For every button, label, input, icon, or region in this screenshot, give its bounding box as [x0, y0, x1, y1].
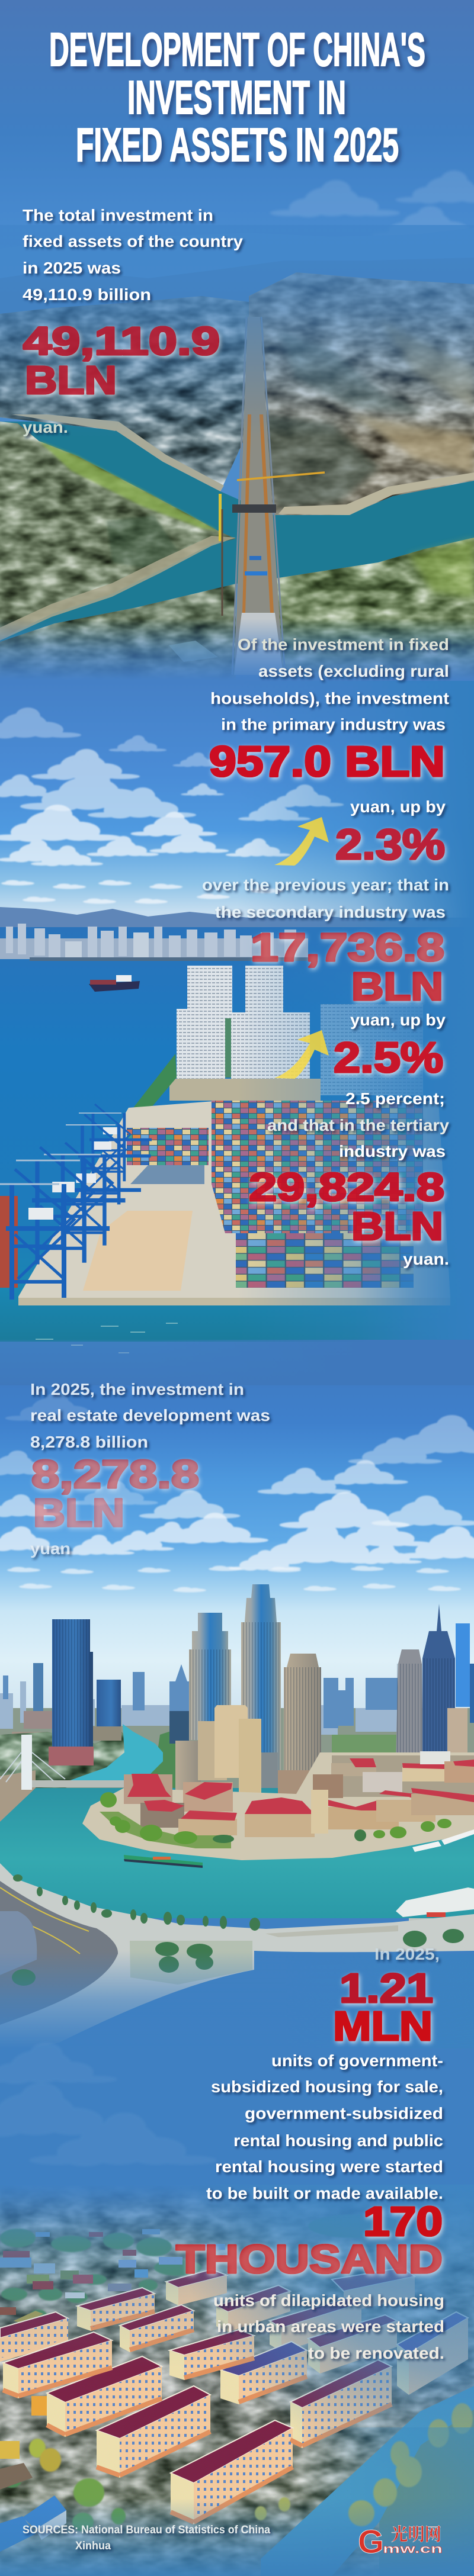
low city: [0, 1708, 474, 1797]
text block: dilapidated housing: [176, 2198, 444, 2362]
figure: 49,110.9 BLN: [23, 319, 220, 403]
text block: total investment: [23, 206, 243, 436]
clouds over city: [0, 1392, 474, 1593]
text block: industry breakdown: the secondary industry was: [215, 903, 446, 921]
illustration: riverside trees: [2, 2403, 473, 2532]
figure: 170 THOUSAND: THOUSAND: [176, 2237, 443, 2282]
illustration: canal: [261, 2386, 474, 2576]
text block: total investment: The total investment in: [23, 206, 213, 224]
left bank greenery: [0, 1732, 133, 1800]
text block: dilapidated housing: units of dilapidated housing: [213, 2291, 444, 2310]
figure: 29,824.8 BLN: 29,824.8: [249, 1165, 444, 1210]
text block: real estate investment: [30, 1380, 270, 1558]
arrow: up 2.3 percent: [274, 817, 329, 866]
logo: gmw.cn: mw.cn: [383, 2543, 443, 2556]
figure: 49,110.9 BLN: BLN: [25, 358, 117, 403]
text block: real estate investment: real estate development was: [30, 1406, 270, 1424]
illustration: cargo ship: [89, 975, 140, 992]
logo: gmw.cn: 光明网: [391, 2525, 441, 2545]
text block: total investment: yuan.: [23, 418, 68, 436]
text block: industry breakdown: Of the investment in fixed: [238, 635, 449, 654]
figure: 2.3%: 2.3%: [335, 821, 445, 869]
text block: industry breakdown: yuan, up by: [350, 1011, 446, 1029]
illustration: promenade and road: [0, 1863, 474, 2054]
text block: real estate investment: In 2025, the investment in: [30, 1380, 244, 1398]
text block: subsidized housing: In 2025,: [374, 1945, 440, 1963]
figure: 49,110.9 BLN: 49,110.9: [23, 319, 220, 364]
text block: industry breakdown: households), the investment: [210, 689, 449, 707]
text block: total investment: fixed assets of the country: [23, 232, 243, 250]
text block: industry breakdown: 2.5 percent;: [345, 1089, 445, 1108]
figure: 957.0 BLN: 957.0 BLN: [209, 738, 445, 786]
figure: 29,824.8 BLN: BLN: [351, 1204, 443, 1249]
text block: industry breakdown: over the previous year; that in: [202, 876, 449, 894]
figure: 1.21 MLN: MLN: [333, 2003, 433, 2049]
text block: industry breakdown: industry was: [339, 1142, 446, 1160]
illustration: dock: [0, 1101, 450, 1305]
sources: SOURCES: National Bureau of Statistics of China: [23, 2524, 270, 2536]
logo: gmw.cn: [358, 2523, 443, 2560]
illustration: skyscrapers: [0, 1584, 474, 1800]
logo: gmw.cn: G: [358, 2523, 384, 2560]
illustration: trees and roads around small houses: [0, 2214, 403, 2324]
text block: subsidized housing: to be built or made available.: [206, 2184, 443, 2202]
figure: 17,736.8 BLN: BLN: [351, 964, 443, 1009]
figure: 2.5%: 2.5%: [334, 1034, 443, 1082]
figure: 17,736.8 BLN: 17,736.8: [251, 925, 444, 970]
distant city skyline: [0, 924, 314, 961]
illustration: housing blocks: [0, 2268, 468, 2524]
sources: Xinhua: [75, 2540, 111, 2552]
text block: subsidized housing: rental housing were started: [215, 2157, 443, 2176]
text block: industry breakdown: [202, 635, 449, 1268]
panel: mountain bridge scene: [0, 0, 474, 687]
illustration: blue port cranes: [0, 1104, 152, 1300]
figure: 29,824.8 BLN: [249, 1165, 444, 1249]
text block: real estate investment: yuan: [30, 1539, 71, 1558]
text block: dilapidated housing: in urban areas were started: [217, 2317, 444, 2336]
text block: dilapidated housing: to be renovated.: [308, 2344, 444, 2362]
illustration: apartment towers: [133, 966, 423, 1108]
panel: city skyline scene: [0, 1340, 474, 2054]
illustration: river: [65, 1724, 163, 1782]
title: [49, 23, 425, 171]
text block: industry breakdown: in the primary industry was: [221, 715, 446, 734]
figure: 8,278.8 BLN: BLN: [33, 1491, 124, 1535]
clouds over port: [0, 707, 344, 903]
illustration: ferry: [396, 1887, 474, 1924]
text block: industry breakdown: and that in the tertiary: [267, 1116, 449, 1134]
figure: 17,736.8 BLN: [251, 925, 444, 1009]
text block: subsidized housing: rental housing and public: [233, 2131, 443, 2150]
figure: 170 THOUSAND: 170: [363, 2198, 443, 2244]
text block: industry breakdown: assets (excluding rural: [258, 662, 449, 680]
sources: [23, 2524, 270, 2552]
panel: housing estate scene: [0, 2043, 474, 2576]
text block: industry breakdown: yuan, up by: [350, 797, 446, 816]
pylon bridge: [21, 1735, 32, 1790]
illustration: suspension bridge: [219, 317, 325, 675]
figure: 170 THOUSAND: [176, 2198, 443, 2282]
mountain shading: [261, 320, 474, 509]
figure: 1.21 MLN: [333, 1965, 433, 2049]
figure: 8,278.8 BLN: 8,278.8: [31, 1452, 199, 1497]
illustration: blue roof houses: [0, 2396, 66, 2552]
figure: 8,278.8 BLN: [31, 1452, 199, 1535]
illustration: container yard: [127, 1101, 423, 1288]
text block: total investment: 49,110.9 billion: [23, 285, 151, 304]
text block: subsidized housing: units of government-: [271, 2051, 443, 2070]
arrow: up 2.5 percent: [274, 1030, 329, 1079]
text block: subsidized housing: [206, 1945, 443, 2202]
text block: industry breakdown: yuan.: [403, 1250, 449, 1268]
sea glints: [36, 1323, 178, 1353]
panel: port scene: [0, 681, 474, 1353]
illustration: waterfront island: [82, 1751, 474, 1868]
text block: subsidized housing: subsidized housing for sale,: [211, 2077, 443, 2096]
text block: subsidized housing: government-subsidized: [245, 2104, 443, 2122]
figure: 1.21 MLN: 1.21: [340, 1965, 433, 2011]
text block: real estate investment: 8,278.8 billion: [30, 1433, 148, 1451]
illustration: waterfront water: [0, 1788, 474, 1918]
text block: total investment: in 2025 was: [23, 259, 121, 277]
